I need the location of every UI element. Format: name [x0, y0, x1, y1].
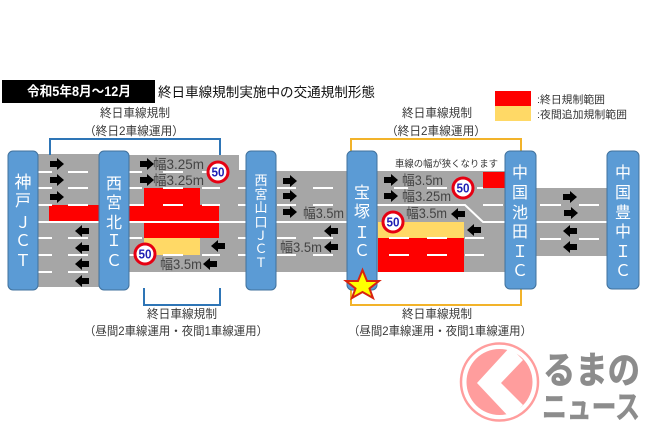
lane width labels: 幅3.25m: [402, 189, 451, 204]
box: Chugoku-Toyonaka IC: 中: [615, 164, 631, 182]
period label: [2, 80, 155, 103]
box: Takarazuka IC: 塚: [354, 203, 370, 221]
box: Nishinomiya-yamaguchi JCT: 西: [254, 173, 268, 188]
box: Nishinomiya-yamaguchi JCT: 山: [254, 200, 268, 215]
box: Nishinomiya-kita IC: 西: [106, 176, 122, 193]
speed limit signs: 50: [386, 214, 400, 230]
box: Nishinomiya-yamaguchi JCT: Ｔ: [254, 255, 268, 270]
lane width labels: 幅3.5m: [402, 173, 443, 188]
box: Kobe JCT: Ｃ: [15, 233, 31, 250]
traffic arrows: [50, 158, 578, 287]
box: Chugoku-Ikeda IC: 池: [512, 204, 528, 222]
label: right top regulation: 終日車線規制: [402, 106, 472, 120]
box: Nishinomiya-yamaguchi JCT: 口: [254, 215, 268, 230]
box: Nishinomiya-kita IC: 北: [106, 214, 122, 232]
box: Chugoku-Toyonaka IC: Ｉ: [615, 244, 631, 261]
box: Kobe JCT: Ｊ: [15, 215, 31, 232]
yellow bracket: [351, 139, 521, 305]
lane narrowing note: 車線の幅が狭くなります: [395, 158, 498, 169]
box: Kobe JCT: 戸: [15, 193, 31, 210]
logo: kuruma no news: [461, 344, 640, 425]
box: Nishinomiya-yamaguchi JCT: [246, 151, 276, 290]
lane width labels: 幅3.25m: [153, 157, 204, 172]
box: Nishinomiya-kita IC: Ｉ: [106, 233, 122, 250]
box: Kobe JCT: [8, 151, 38, 290]
title: 終日車線規制実施中の交通規制形態: [158, 85, 375, 100]
label: left top regulation: [84, 106, 184, 138]
label: right top regulation: [386, 106, 486, 138]
lane markings: [38, 172, 607, 272]
label: right bottom regulation: [348, 307, 532, 338]
label: left bottom regulation: （昼間2車線運用・夜間1車線運用）: [84, 324, 268, 338]
box: Takarazuka IC: Ｉ: [354, 225, 370, 242]
box: Nishinomiya-kita IC: Ｃ: [106, 253, 122, 270]
legend: :夜間追加規制範囲: [537, 108, 627, 121]
box: Chugoku-Ikeda IC: [505, 151, 536, 289]
speed limit signs: [135, 162, 473, 264]
box: Chugoku-Ikeda IC: 田: [512, 224, 528, 241]
label: left top regulation: 終日車線規制: [100, 106, 170, 120]
lane width labels: 幅3.5m: [280, 240, 322, 255]
box: Chugoku-Toyonaka IC: 中: [615, 223, 631, 241]
blue brackets: [50, 139, 220, 305]
box: Nishinomiya-yamaguchi JCT: Ｊ: [254, 228, 268, 243]
label: right bottom regulation: 終日車線規制: [402, 307, 472, 321]
box: Kobe JCT: 神: [14, 173, 32, 192]
lane width labels: [153, 157, 451, 272]
label: left bottom regulation: [84, 307, 268, 338]
box: Chugoku-Ikeda IC: 中: [512, 164, 528, 182]
road surface: [38, 154, 607, 287]
box: Chugoku-Toyonaka IC: Ｃ: [615, 263, 631, 280]
box: Chugoku-Toyonaka IC: 国: [615, 185, 631, 202]
label: right top regulation: （終日2車線運用）: [386, 124, 486, 138]
lane width labels: 幅3.25m: [153, 173, 204, 188]
legend: [495, 91, 627, 121]
label: left top regulation: （終日2車線運用）: [84, 124, 184, 138]
lane width labels: 幅3.5m: [406, 206, 447, 221]
legend: :終日規制範囲: [537, 93, 605, 106]
restriction areas: [49, 172, 505, 272]
speed limit signs: 50: [138, 246, 152, 262]
box: Nishinomiya-yamaguchi JCT: Ｃ: [254, 241, 268, 256]
lane width labels: 幅3.5m: [160, 257, 202, 272]
box: Chugoku-Ikeda IC: Ｃ: [512, 263, 528, 280]
label: right bottom regulation: （昼間2車線運用・夜間1車線運用）: [348, 324, 532, 338]
box: Chugoku-Toyonaka IC: 豊: [615, 204, 631, 222]
period label: 令和5年8月～12月: [27, 83, 131, 99]
box: Takarazuka IC: 宝: [354, 184, 370, 202]
label: left bottom regulation: 終日車線規制: [147, 307, 217, 321]
box: Takarazuka IC: [347, 151, 377, 290]
box: Chugoku-Ikeda IC: Ｉ: [512, 244, 528, 261]
speed limit signs: 50: [456, 180, 470, 196]
box: Nishinomiya-kita IC: 宮: [106, 194, 122, 212]
box: Kobe JCT: Ｔ: [15, 253, 31, 270]
lane width labels: 幅3.5m: [303, 206, 344, 221]
speed limit signs: 50: [212, 164, 224, 180]
box: Chugoku-Ikeda IC: 国: [512, 185, 528, 202]
box: Nishinomiya-yamaguchi JCT: 宮: [254, 187, 268, 202]
box: Nishinomiya-kita IC: [99, 151, 129, 290]
box: Chugoku-Toyonaka IC: [607, 151, 639, 289]
box: Takarazuka IC: Ｃ: [354, 243, 370, 260]
icon: accident star: [346, 270, 379, 298]
